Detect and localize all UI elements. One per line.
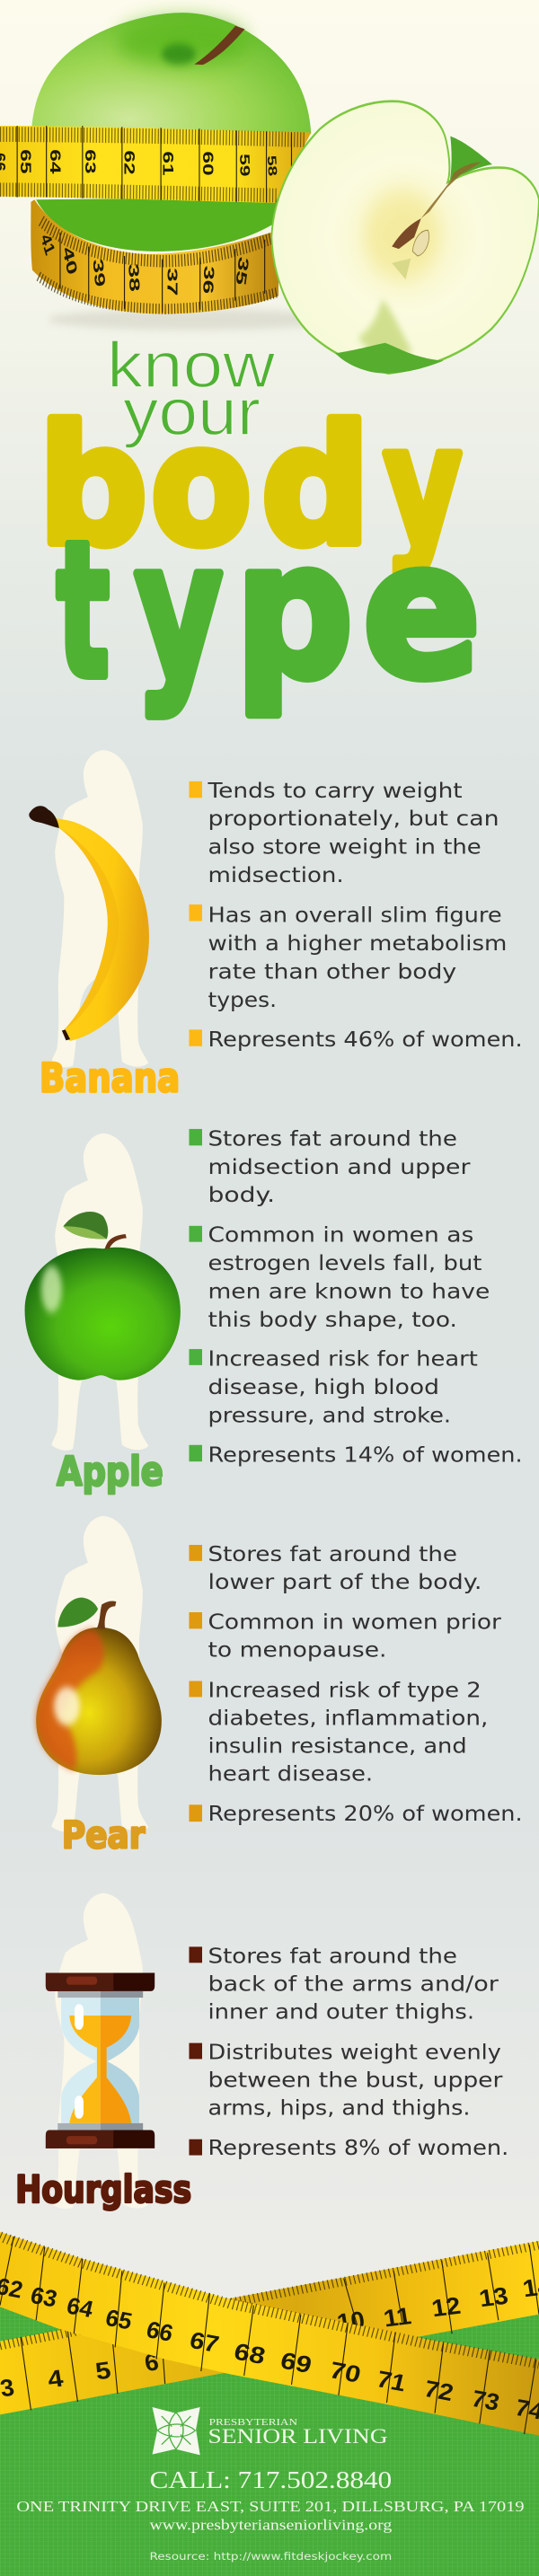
bullet list: apple: Common in women as: [208, 1222, 473, 1247]
label: Apple: Apple: [57, 1449, 163, 1495]
icon: hourglass: [46, 1973, 155, 2148]
upper measuring tape: 58: [264, 154, 279, 177]
bullet list: apple: body.: [208, 1182, 275, 1207]
bullet list: apple: midsection and upper: [208, 1154, 471, 1179]
bullet list: apple: [189, 1125, 523, 1468]
tape: descending: 67: [187, 2327, 222, 2358]
tape: descending: [0, 2232, 539, 2436]
bullet list: banana: also store weight in the: [208, 834, 482, 859]
tape: descending: 71: [375, 2366, 409, 2396]
upper measuring tape: 63: [82, 149, 98, 173]
tape: ascending: 12: [429, 2292, 463, 2323]
tape: ascending: 11: [382, 2303, 413, 2333]
bullet list: apple: disease, high blood: [208, 1374, 439, 1399]
tape: ascending: 4: [46, 2365, 65, 2394]
title: body: d: [261, 391, 370, 581]
tape: descending: 65: [103, 2305, 135, 2334]
title: type: e: [363, 503, 481, 720]
lower measuring tape: 39: [89, 258, 108, 288]
body silhouette: [51, 1893, 148, 2209]
bullet list: hourglass: back of the arms and/or: [208, 1972, 499, 1996]
bullet list: apple: Increased risk for heart: [208, 1345, 478, 1371]
bullet list: pear: lower part of the body.: [208, 1569, 482, 1594]
tape: descending: 72: [421, 2376, 456, 2406]
bullet list: apple: pressure, and stroke.: [208, 1402, 451, 1427]
bullet list: apple: Represents 14% of women.: [208, 1442, 523, 1468]
upper measuring tape: 60: [199, 151, 216, 176]
upper measuring tape: 65: [17, 149, 33, 173]
bullet list: hourglass: between the bust, upper: [208, 2068, 503, 2092]
tape: ascending: 13: [477, 2282, 510, 2313]
title: type: [57, 503, 481, 720]
bullet list: hourglass: [189, 1944, 508, 2160]
bullet list: pear: insulin resistance, and: [208, 1734, 467, 1758]
bullet list: banana: Tends to carry weight: [207, 778, 463, 803]
title: type: y: [135, 503, 223, 720]
lower measuring tape: [31, 199, 278, 313]
bullet list: hourglass: arms, hips, and thighs.: [208, 2095, 470, 2120]
apple stem: [194, 26, 244, 65]
resource: Resource: http://www.fitdeskjockey.com: [149, 2551, 392, 2563]
upper measuring tape: 59: [237, 154, 253, 177]
title: know your: know: [107, 331, 276, 401]
title: body: b: [39, 391, 147, 581]
label: Banana: Banana: [40, 1055, 180, 1102]
tape: descending: 73: [469, 2386, 502, 2415]
title: body: o: [151, 391, 252, 581]
tape: descending: 70: [327, 2357, 364, 2387]
lower measuring tape: 40: [59, 244, 80, 278]
bullet list: hourglass: Represents 8% of women.: [208, 2136, 508, 2160]
lower measuring tape: 41: [37, 231, 57, 259]
green textured band: [0, 2307, 539, 2576]
icon: pear: [36, 1598, 162, 1775]
title: body: [39, 391, 462, 581]
bullet list: pear: Represents 20% of women.: [208, 1802, 523, 1826]
label: Pear: Pear: [62, 1813, 146, 1857]
tape: descending: 69: [278, 2347, 314, 2378]
bullet list: apple: Stores fat around the: [208, 1125, 457, 1151]
icon: green apple: [25, 1212, 181, 1381]
bullet list: banana: proportionately, but can: [208, 806, 499, 831]
body silhouette: [51, 1134, 148, 1451]
body silhouette: [51, 750, 148, 1067]
tape: descending: 64: [64, 2292, 96, 2323]
title: type: p: [235, 503, 353, 720]
tape: ascending: 5: [93, 2357, 113, 2386]
bullet list: banana: with a higher metabolism: [208, 931, 507, 956]
bullet list: pear: heart disease.: [208, 1761, 373, 1786]
footer: [0, 2232, 539, 2576]
lower measuring tape: 35: [232, 255, 251, 287]
lower measuring tape: 36: [199, 265, 216, 295]
bullet list: apple: this body shape, too.: [208, 1307, 457, 1332]
bullet list: apple: men are known to have: [208, 1279, 490, 1303]
upper measuring tape: 61: [159, 151, 176, 176]
title: type: t: [57, 503, 110, 720]
bullet list: banana: types.: [208, 987, 277, 1012]
upper measuring tape: [0, 126, 311, 203]
bullet list: hourglass: Stores fat around the: [208, 1944, 457, 1968]
header illustration: apple and tape: [0, 13, 539, 374]
bullet list: pear: diabetes, inflammation,: [208, 1706, 488, 1730]
tape: ascending: 6: [143, 2349, 161, 2377]
bullet list: banana: rate than other body: [208, 958, 456, 984]
logo: wordmark: PRESBYTERIAN: [209, 2418, 298, 2428]
bullet list: pear: Common in women prior: [208, 1610, 502, 1634]
bullet list: hourglass: Distributes weight evenly: [208, 2040, 501, 2064]
apple core and seeds: [392, 218, 421, 249]
bullet list: hourglass: inner and outer thighs.: [208, 1999, 474, 2024]
title: body: y: [384, 391, 462, 581]
bullet list: banana: Has an overall slim figure: [208, 903, 502, 927]
phone number: CALL: 717.502.8840: [149, 2467, 392, 2493]
panel: pear: [36, 1516, 523, 1857]
label: Hourglass: Hourglass: [15, 2168, 191, 2211]
panel: hourglass: [15, 1893, 508, 2211]
lower measuring tape: 37: [164, 268, 180, 296]
shadow under apple: [49, 309, 337, 330]
bullet list: pear: Increased risk of type 2: [208, 1678, 482, 1702]
tape: descending: 66: [144, 2316, 175, 2346]
lower measuring tape: 38: [125, 263, 142, 293]
logo: flower mark: [153, 2407, 200, 2455]
title: know your: [107, 331, 276, 449]
bullet list: banana: Represents 46% of women.: [208, 1027, 523, 1052]
upper measuring tape: 64: [47, 149, 63, 174]
panel: apple: [25, 1125, 523, 1495]
body silhouette: [51, 1516, 148, 1831]
bullet list: banana: midsection.: [208, 862, 344, 887]
tape: descending: 68: [232, 2338, 268, 2369]
bullet list: apple: estrogen levels fall, but: [208, 1250, 482, 1275]
bullet list: pear: [189, 1541, 523, 1826]
bullet list: pear: Stores fat around the: [208, 1541, 457, 1566]
upper measuring tape: 62: [120, 150, 137, 175]
tape: ascending: 10: [335, 2307, 367, 2336]
tape: ascending: [0, 2241, 539, 2414]
address: ONE TRINITY DRIVE EAST, SUITE 201, DILLSBURG, PA 17019: [16, 2498, 525, 2516]
panel: banana: [29, 750, 523, 1102]
title: know your: your: [123, 376, 261, 449]
whole green apple: [31, 13, 311, 251]
tape: descending: 63: [28, 2282, 60, 2312]
bullet list: pear: to menopause.: [208, 1637, 386, 1662]
website: www.presbyterianseniorliving.org: [149, 2517, 392, 2533]
sliced apple half: [271, 101, 539, 374]
icon: banana: [29, 806, 149, 1041]
logo: wordmark: SENIOR LIVING: [208, 2425, 388, 2448]
bullet list: banana: [189, 778, 523, 1052]
